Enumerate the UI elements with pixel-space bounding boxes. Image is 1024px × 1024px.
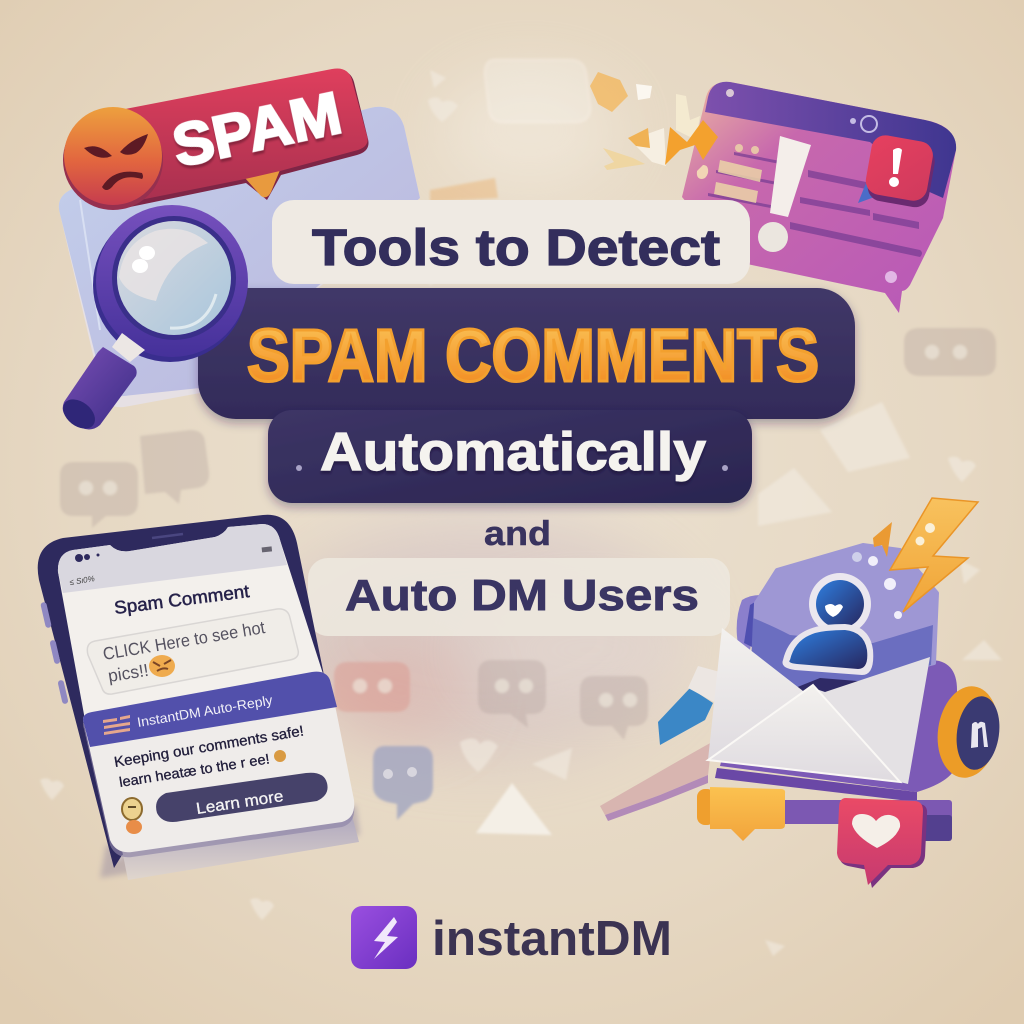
red alert badge — [858, 133, 937, 209]
logo wordmark: instantDM — [432, 912, 672, 966]
envelope robot illustration — [600, 498, 1004, 888]
logo icon — [351, 906, 417, 969]
blue comment panel behind magnifier — [59, 107, 420, 407]
phone body — [38, 515, 352, 868]
purple base — [720, 660, 957, 792]
instantDM logo — [351, 906, 672, 969]
SPAM red speech bubble — [63, 68, 369, 210]
SPAM COMMENTS heading pill — [198, 288, 855, 419]
Tools to Detect heading pill — [272, 200, 750, 284]
InstantDM reply card: InstantDM Auto-Reply — [136, 693, 274, 730]
InstantDM reply card: learn heatæ to the r ee! — [118, 750, 271, 790]
ribbon and paintbrush — [600, 666, 720, 821]
Auto DM Users heading pill — [308, 558, 730, 636]
spam message bubble — [87, 609, 298, 694]
spam message bubble: CLICK Here to see hot — [101, 617, 267, 664]
faint chat bubble and triangles near phone — [373, 746, 552, 835]
Automatically heading pill: Automatically — [320, 422, 706, 482]
Automatically heading pill — [268, 410, 752, 503]
Learn more button: Learn more — [195, 788, 285, 818]
InstantDM reply card: Keeping our comments safe! — [113, 723, 305, 771]
lightning bolts — [873, 498, 978, 612]
header strip — [705, 82, 956, 198]
magnifying glass icon — [57, 205, 248, 435]
browser warning speech bubble — [682, 82, 956, 313]
small orange emoji — [122, 798, 142, 834]
decorative lightning and star accents — [430, 72, 718, 202]
Spam Comment title: Spam Comment — [113, 581, 250, 618]
text lines — [708, 152, 922, 257]
spam message bubble: pics!! — [106, 660, 150, 686]
SPAM label: SPAM — [167, 80, 347, 180]
speech tail — [245, 170, 280, 197]
InstantDM reply card — [83, 672, 354, 857]
big exclamation mark — [758, 136, 811, 252]
status bar text: ≤ Sι0% — [69, 574, 95, 587]
slider bar — [780, 800, 952, 824]
user icon — [782, 573, 873, 675]
red heart bubble — [837, 798, 927, 888]
SPAM COMMENTS heading pill: SPAM COMMENTS — [247, 314, 819, 397]
smartphone mockup — [38, 515, 360, 880]
envelope — [708, 628, 930, 784]
Tools to Detect heading pill: Tools to Detect — [312, 219, 720, 276]
side ear — [737, 595, 760, 650]
phone screen — [58, 524, 325, 720]
lavender body — [754, 545, 937, 693]
Learn more button — [156, 773, 328, 822]
highlighted lines — [714, 144, 762, 203]
yellow comment bubble — [697, 787, 785, 841]
Auto DM Users heading pill: Auto DM Users — [345, 571, 699, 620]
paper under card — [122, 808, 359, 880]
card header — [83, 672, 337, 747]
coin button — [932, 682, 1004, 782]
angry face emoji — [63, 107, 163, 210]
and connector word: and — [484, 515, 551, 553]
